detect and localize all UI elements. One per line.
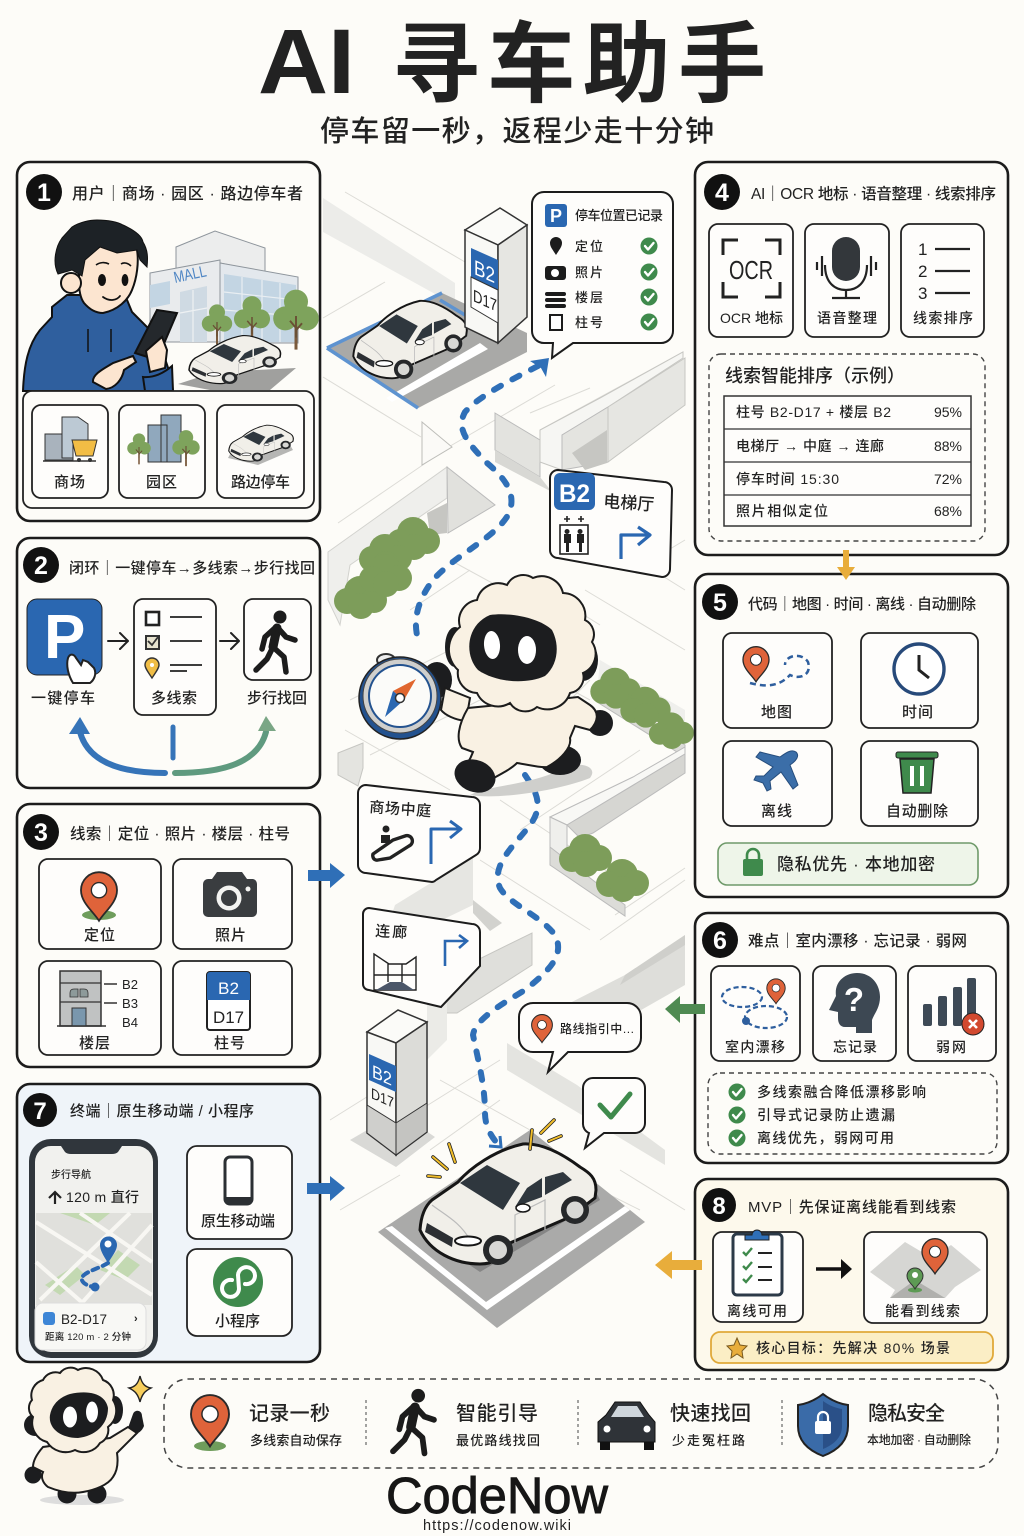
card: location: 定位 bbox=[84, 926, 115, 944]
sign: B2 elevator: 电梯厅 bbox=[603, 492, 655, 515]
dashed box: ranking example bbox=[709, 354, 985, 541]
bubble: check bbox=[583, 1078, 645, 1148]
goal bar bbox=[711, 1332, 993, 1363]
card: photo: 照片 bbox=[215, 927, 246, 944]
sign: mall atrium: 商场中庭 bbox=[369, 798, 432, 820]
panel 3: clues: 3 bbox=[34, 819, 48, 847]
card: pillar number: 柱号 bbox=[214, 1035, 245, 1052]
arrow bbox=[220, 633, 239, 649]
bubble: route guidance bbox=[519, 1003, 641, 1072]
panel 3: clues bbox=[17, 804, 320, 1067]
panel 2: loop: 2 bbox=[34, 552, 48, 580]
multi-clue card: 多线索 bbox=[151, 690, 197, 707]
loop arrows bbox=[69, 716, 276, 773]
benefits strip bbox=[164, 1379, 998, 1468]
card: floor bbox=[39, 961, 161, 1055]
one-tap parking bbox=[27, 599, 102, 707]
card: pillar number: D17 bbox=[213, 1008, 244, 1027]
goal bar: 核心目标：先解决 80% 场景 bbox=[756, 1340, 950, 1356]
card: OCR: OCR bbox=[729, 255, 773, 285]
benefit: record bbox=[191, 1395, 342, 1451]
card: voice bbox=[805, 224, 889, 337]
panel 4: AI: 4 bbox=[715, 179, 729, 207]
highlight marks: yellow bbox=[428, 1120, 561, 1177]
arrow bbox=[108, 633, 128, 649]
phone mockup: 步行导航 bbox=[51, 1168, 91, 1181]
dashed box: solutions: 离线优先，弱网可用 bbox=[757, 1130, 894, 1146]
privacy bar: 隐私优先 · 本地加密 bbox=[777, 854, 935, 874]
highlight marks bbox=[428, 1120, 561, 1177]
subtitle: 停车留一秒，返程少走十分钟 bbox=[320, 115, 714, 148]
card: floor: B3 bbox=[122, 996, 138, 1011]
arrow: panel 8 to map bbox=[655, 1251, 702, 1279]
pillar: B2 D17 top: B2 bbox=[474, 255, 495, 288]
mascot: pointing sheep bbox=[24, 1368, 151, 1505]
arrow: panel 7 to map bbox=[307, 1176, 345, 1201]
benefit: record: 记录一秒 bbox=[249, 1402, 330, 1425]
card: can see clues bbox=[864, 1232, 987, 1323]
benefit: guide: 智能引导 bbox=[456, 1402, 538, 1425]
wall: lower right bbox=[507, 1043, 665, 1165]
bushes: lower bbox=[559, 834, 649, 902]
card: floor: 楼层 bbox=[79, 1035, 110, 1052]
dashed box: ranking example: 电梯厅 → 中庭 → 连廊 bbox=[736, 438, 884, 454]
card: can see clues: 能看到线索 bbox=[885, 1303, 960, 1319]
panel 1: users bbox=[17, 162, 320, 521]
panel 8: MVP bbox=[695, 1179, 1008, 1370]
card: forget: 忘记录 bbox=[833, 1039, 877, 1055]
card: ranking: 线索排序 bbox=[913, 310, 973, 326]
route: upper dotted bbox=[416, 366, 538, 645]
card: pillar number: B2 bbox=[218, 979, 239, 998]
panel 6: difficulties: 难点｜室内漂移 · 忘记录 · 弱网 bbox=[748, 931, 967, 950]
central isometric map bbox=[323, 192, 694, 1210]
benefit: privacy bbox=[798, 1394, 971, 1456]
panel 5: code: 代码｜地图 · 时间 · 离线 · 自动删除 bbox=[748, 595, 976, 613]
sign: corridor bbox=[363, 908, 480, 1007]
pillar: B2 D17 top bbox=[465, 208, 527, 343]
pillar: B2 D17 bottom: B2 bbox=[372, 1061, 392, 1090]
panel 7: terminals: 终端｜原生移动端 / 小程序 bbox=[70, 1103, 254, 1120]
card: drift: 室内漂移 bbox=[725, 1039, 785, 1055]
card: OCR bbox=[709, 224, 793, 337]
bubble: location recorded: 停车位置已记录 bbox=[575, 208, 663, 223]
icon: sparkle bbox=[129, 1376, 151, 1402]
card: weak network bbox=[908, 966, 996, 1061]
parking spot: bottom with car bbox=[378, 1130, 645, 1328]
pillar: B2 D17 bottom: D17 bbox=[371, 1086, 394, 1112]
dashed box: ranking example: 72% bbox=[934, 471, 962, 487]
card: offline available bbox=[713, 1230, 803, 1322]
wall: under signs bbox=[380, 857, 473, 950]
mascot: running sheep with compass bbox=[359, 575, 613, 798]
dashed box: ranking example: 68% bbox=[934, 503, 962, 519]
dashed box: ranking example: 88% bbox=[934, 438, 962, 454]
dashed box: ranking example: 95% bbox=[934, 404, 962, 420]
card: auto delete bbox=[861, 741, 978, 826]
block: corner bbox=[422, 422, 452, 465]
arrow bbox=[816, 1259, 852, 1279]
one-tap parking: P bbox=[44, 603, 85, 672]
card: OCR: OCR 地标 bbox=[720, 310, 783, 326]
arrow: panel 6 to map bbox=[665, 996, 705, 1023]
benefit: record: 多线索自动保存 bbox=[250, 1433, 342, 1448]
card: ranking: 3 bbox=[918, 284, 927, 303]
card: weak network: 弱网 bbox=[936, 1039, 966, 1055]
card: floor: B4 bbox=[122, 1015, 138, 1030]
card: offline bbox=[723, 741, 832, 826]
dashed box: solutions bbox=[708, 1073, 997, 1154]
panel 1: users: 1 bbox=[37, 179, 51, 207]
panel 7: terminals bbox=[17, 1084, 320, 1362]
phone mockup bbox=[29, 1139, 158, 1358]
card: ranking bbox=[901, 224, 984, 337]
phone mockup: › bbox=[134, 1313, 138, 1325]
sign: B2 elevator: B2 bbox=[559, 480, 590, 508]
dashed box: ranking example: 线索智能排序（示例） bbox=[725, 366, 905, 386]
card: offline available: 离线可用 bbox=[727, 1303, 787, 1319]
phone mockup: 距离 120 m · 2 分钟 bbox=[45, 1331, 131, 1343]
icon: compass bbox=[359, 654, 441, 739]
one-tap parking: 一键停车 bbox=[31, 689, 95, 707]
bubble: location recorded: 楼层 bbox=[575, 290, 603, 305]
wall: curved planter bbox=[328, 467, 447, 625]
panel 3: clues: 线索｜定位 · 照片 · 楼层 · 柱号 bbox=[70, 824, 290, 843]
sign: B2 elevator bbox=[550, 470, 672, 577]
dashed box: ranking example: 停车时间 15:30 bbox=[736, 471, 839, 487]
card: drift bbox=[711, 966, 800, 1061]
pillar: B2 D17 bottom bbox=[350, 1010, 435, 1167]
card: native mobile bbox=[187, 1146, 292, 1239]
card: mini program: 小程序 bbox=[215, 1313, 260, 1330]
arrow: panel 3 to map bbox=[308, 863, 345, 888]
card: floor: B2 bbox=[122, 977, 138, 992]
card: ranking: 2 bbox=[918, 262, 927, 281]
frame: user types: 园区 bbox=[146, 474, 177, 491]
parking spot: top bbox=[327, 293, 527, 408]
frame: user types bbox=[23, 391, 314, 508]
phone mockup: 120 m 直行 bbox=[66, 1189, 139, 1205]
bubble: route guidance: 路线指引中... bbox=[560, 1021, 634, 1036]
card: time bbox=[861, 633, 978, 728]
card: native mobile: 原生移动端 bbox=[201, 1213, 275, 1230]
card: mini program bbox=[187, 1249, 292, 1336]
card: time: 时间 bbox=[902, 704, 933, 721]
walking card: 步行找回 bbox=[247, 690, 307, 707]
card: offline: 离线 bbox=[761, 803, 792, 820]
route: arrow head bbox=[530, 358, 549, 377]
multi-clue card bbox=[134, 599, 216, 715]
bubble: location recorded: 柱号 bbox=[575, 315, 603, 330]
frame: user types: 路边停车 bbox=[231, 474, 290, 491]
pillar: B2 D17 top: D17 bbox=[473, 286, 497, 316]
benefit: guide: 最优路线找回 bbox=[456, 1433, 540, 1448]
panel 6: difficulties: 6 bbox=[713, 927, 727, 955]
dashed box: solutions: 多线索融合降低漂移影响 bbox=[757, 1084, 926, 1100]
illustration: mall bbox=[150, 231, 319, 350]
title: 寻车助手 bbox=[392, 15, 766, 114]
panel 2: loop bbox=[17, 538, 320, 788]
panel 8: MVP: MVP｜先保证离线能看到线索 bbox=[748, 1199, 956, 1216]
frame: user types: 商场 bbox=[54, 474, 85, 491]
card: ranking: 1 bbox=[918, 240, 927, 259]
panel 8: MVP: 8 bbox=[712, 1193, 726, 1220]
wall: top left bbox=[323, 198, 455, 305]
illustration: person with phone bbox=[23, 220, 177, 391]
panel 1: users: 用户｜商场 · 园区 · 路边停车者 bbox=[72, 185, 303, 203]
card: photo bbox=[173, 859, 292, 949]
phone mockup: B2-D17 bbox=[61, 1312, 107, 1327]
walking card bbox=[244, 599, 311, 707]
panel 4: AI bbox=[695, 162, 1008, 555]
wall: middle block bbox=[495, 413, 540, 477]
card: auto delete: 自动删除 bbox=[886, 802, 948, 820]
card: map bbox=[723, 633, 832, 728]
route: lower dotted bbox=[473, 775, 558, 1143]
benefit: find fast: 快速找回 bbox=[670, 1402, 751, 1425]
bubble: location recorded bbox=[532, 192, 673, 358]
illustration: small car bbox=[178, 336, 296, 390]
benefit: privacy: 本地加密 · 自动删除 bbox=[867, 1432, 971, 1447]
route: destination arrow bbox=[489, 1136, 501, 1147]
card: forget: ? bbox=[844, 981, 864, 1018]
wall: inner box bbox=[447, 467, 495, 533]
panel 7: terminals: 7 bbox=[33, 1098, 47, 1125]
card: location bbox=[39, 859, 161, 949]
card: forget bbox=[813, 966, 896, 1061]
dashed box: ranking example: 照片相似定位 bbox=[736, 503, 828, 519]
wall: right diagonal bbox=[597, 660, 685, 745]
privacy bar bbox=[718, 843, 978, 885]
title: AI bbox=[258, 11, 355, 113]
wall: left low bbox=[338, 743, 363, 786]
benefit: privacy: 隐私安全 bbox=[868, 1402, 945, 1425]
panel 2: loop: 闭环｜一键停车→多线索→步行找回 bbox=[69, 559, 315, 577]
benefit: find fast: 少走冤枉路 bbox=[672, 1433, 745, 1448]
url: https://codenow.wiki bbox=[423, 1518, 571, 1534]
arrow: panel 4 to 5 bbox=[837, 550, 855, 580]
sign: corridor: 连廊 bbox=[375, 923, 408, 942]
bubble: location recorded: P bbox=[550, 206, 562, 226]
benefit: find fast bbox=[598, 1402, 751, 1450]
panel 5: code: 5 bbox=[713, 589, 727, 617]
bushes: right bbox=[590, 668, 694, 749]
illustration: mall: MALL bbox=[172, 263, 208, 287]
card: map: 地图 bbox=[761, 704, 792, 721]
dashed box: solutions: 引导式记录防止遗漏 bbox=[757, 1107, 895, 1123]
logo: CodeNow: CodeNow bbox=[386, 1467, 608, 1524]
sign: mall atrium bbox=[358, 785, 480, 882]
card: voice: 语音整理 bbox=[817, 310, 877, 326]
bubble: location recorded: 照片 bbox=[575, 265, 603, 280]
bubble: location recorded: 定位 bbox=[575, 239, 603, 254]
dashed box: ranking example: 柱号 B2-D17 + 楼层 B2 bbox=[736, 404, 891, 420]
panel 5: code bbox=[695, 574, 1008, 897]
panel 4: AI: AI｜OCR 地标 · 语音整理 · 线索排序 bbox=[751, 184, 996, 203]
benefit: guide bbox=[393, 1389, 540, 1453]
panel 6: difficulties bbox=[695, 913, 1008, 1163]
bushes bbox=[334, 517, 440, 619]
card: pillar number bbox=[173, 961, 292, 1055]
